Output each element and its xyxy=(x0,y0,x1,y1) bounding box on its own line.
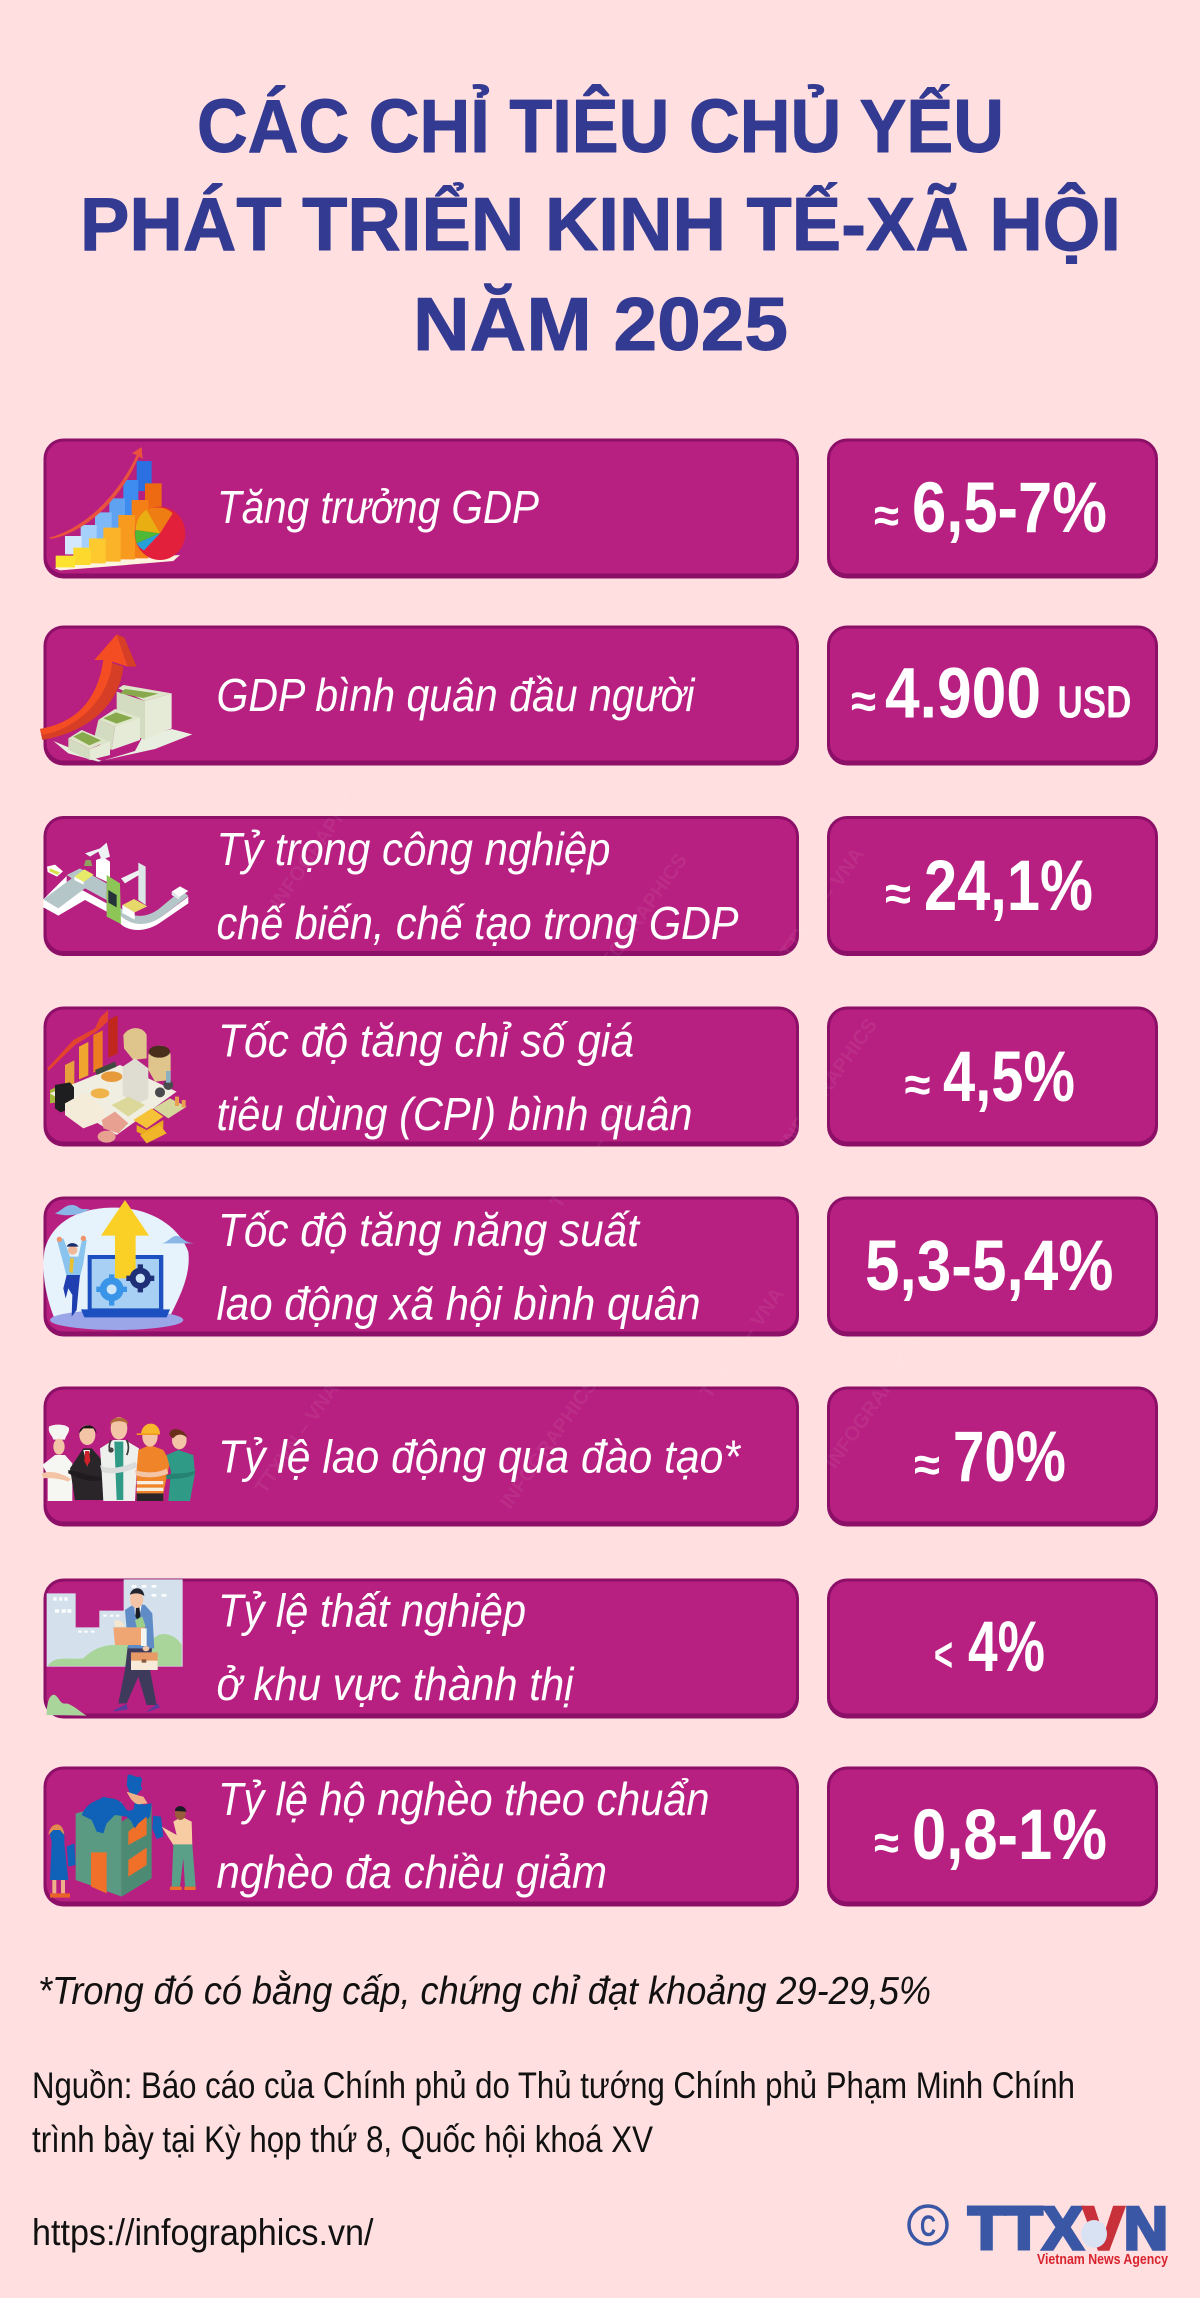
label text: Tỷ trọng công nghiệp xyxy=(216,823,610,875)
panel: GDP per capita value: 4.900 xyxy=(885,654,1041,734)
panel: unemployment value xyxy=(827,1578,1158,1718)
panel: industry share value: ≈ xyxy=(885,868,911,921)
watermark: INFOGRAPHICS xyxy=(776,1015,882,1153)
title xyxy=(80,84,1121,366)
website url: https://infographics.vn/ xyxy=(32,2212,374,2253)
icon: group of workers xyxy=(42,1417,196,1501)
watermark: INFOGRAPHICS xyxy=(586,850,692,988)
label text xyxy=(216,1014,692,1140)
panel: productivity value xyxy=(827,1196,1158,1336)
panel: unemployment value: 4% xyxy=(968,1608,1045,1687)
row: trained workers xyxy=(42,1386,1158,1526)
panel: unemployment value: < xyxy=(934,1629,953,1682)
footnote: *Trong đó có bằng cấp, chứng chỉ đạt khoảng 29-29,5% xyxy=(38,1970,931,2013)
label text: nghèo đa chiều giảm xyxy=(216,1846,607,1898)
watermark: TTXVN – VNA xyxy=(251,1379,344,1498)
label text: tiêu dùng (CPI) bình quân xyxy=(216,1088,692,1140)
watermark: TTXVN – VNA xyxy=(696,1284,789,1403)
panel: productivity value: 5,3-5,4% xyxy=(865,1227,1114,1306)
label text: Tăng trưởng GDP xyxy=(217,481,539,533)
label text: Tỷ lệ thất nghiệp xyxy=(218,1584,526,1636)
row: labour productivity xyxy=(43,1196,1158,1336)
panel: GDP growth value xyxy=(827,438,1158,578)
source text: trình bày tại Kỳ họp thứ 8, Quốc hội khoá XV xyxy=(32,2119,653,2160)
icon: puzzle house xyxy=(48,1775,196,1898)
logo: TTXVN: C xyxy=(920,2210,936,2243)
watermark xyxy=(251,775,927,1513)
icon: money stacks with arrow xyxy=(40,634,192,762)
panel: poverty value xyxy=(827,1766,1158,1906)
panel: GDP per capita value: ≈ xyxy=(851,676,876,728)
label text: GDP bình quân đầu người xyxy=(216,669,696,721)
panel: trained workers value: ≈ xyxy=(914,1439,940,1492)
label text: lao động xã hội bình quân xyxy=(216,1278,700,1330)
title: PHÁT TRIỂN KINH TẾ-XÃ HỘI xyxy=(80,182,1121,266)
panel: GDP per capita value xyxy=(827,626,1158,766)
watermark: TTXVN – VNA xyxy=(546,1094,639,1213)
row: processing industry share xyxy=(43,816,1158,956)
label text xyxy=(216,823,739,949)
watermark: INFOGRAPHICS xyxy=(496,1375,602,1513)
panel: industry share value: 24,1% xyxy=(924,847,1093,926)
icon: consumer goods xyxy=(47,1010,187,1143)
watermark: INFOGRAPHICS xyxy=(266,775,372,913)
label text xyxy=(216,1584,575,1710)
panel: CPI value xyxy=(827,1006,1158,1146)
watermark: TTXVN – VNA xyxy=(776,844,869,963)
label text xyxy=(216,1204,700,1330)
panel: GDP growth value: 6,5-7% xyxy=(912,469,1107,548)
row: urban unemployment xyxy=(44,1578,1158,1718)
panel: GDP growth value: ≈ xyxy=(874,490,899,543)
panel: unemployment label xyxy=(44,1578,799,1718)
logo: TTXVN: Vietnam News Agency xyxy=(1037,2251,1169,2268)
row: CPI growth xyxy=(44,1006,1158,1146)
row: GDP per capita xyxy=(40,626,1158,766)
label text: chế biến, chế tạo trong GDP xyxy=(216,897,739,949)
logo: TTXVN: TTXVN xyxy=(968,2195,1168,2262)
label text xyxy=(216,1773,710,1898)
panel: poverty value: ≈ xyxy=(874,1817,899,1870)
icon: factory conveyor xyxy=(43,843,188,930)
row: GDP growth xyxy=(44,438,1158,578)
panel: CPI value: 4,5% xyxy=(943,1038,1075,1117)
panel: poverty value: 0,8-1% xyxy=(912,1796,1107,1875)
watermark: INFOGRAPHICS xyxy=(821,1335,927,1473)
panel: GDP growth label xyxy=(44,438,799,578)
icon: unemployed worker xyxy=(47,1579,183,1716)
panel: industry share label xyxy=(43,816,799,956)
label text: Tốc độ tăng chỉ số giá xyxy=(218,1014,634,1066)
row: poverty rate xyxy=(44,1766,1158,1906)
title: NĂM 2025 xyxy=(413,282,788,366)
label text: ở khu vực thành thị xyxy=(216,1658,575,1710)
icon: productivity arrow and laptop xyxy=(43,1200,194,1330)
label text: Tỷ lệ lao động qua đào tạo* xyxy=(218,1430,742,1482)
source text xyxy=(32,2065,1075,2160)
panel: CPI label xyxy=(44,1006,799,1146)
panel: trained workers value: 70% xyxy=(953,1418,1066,1497)
label text: Tỷ lệ hộ nghèo theo chuẩn xyxy=(218,1773,710,1825)
label text: Tốc độ tăng năng suất xyxy=(218,1204,641,1256)
panel: trained workers value xyxy=(827,1386,1158,1526)
panel: poverty label xyxy=(44,1766,799,1906)
panel: CPI value: ≈ xyxy=(904,1059,930,1112)
panel: GDP per capita label xyxy=(40,626,799,766)
panel: GDP per capita value: USD xyxy=(1058,676,1132,728)
title: CÁC CHỈ TIÊU CHỦ YẾU xyxy=(197,84,1004,168)
icon: bar chart with pie xyxy=(49,447,185,570)
panel: trained workers label xyxy=(42,1386,799,1526)
panel: industry share value xyxy=(827,816,1158,956)
panel: productivity label xyxy=(43,1196,799,1336)
